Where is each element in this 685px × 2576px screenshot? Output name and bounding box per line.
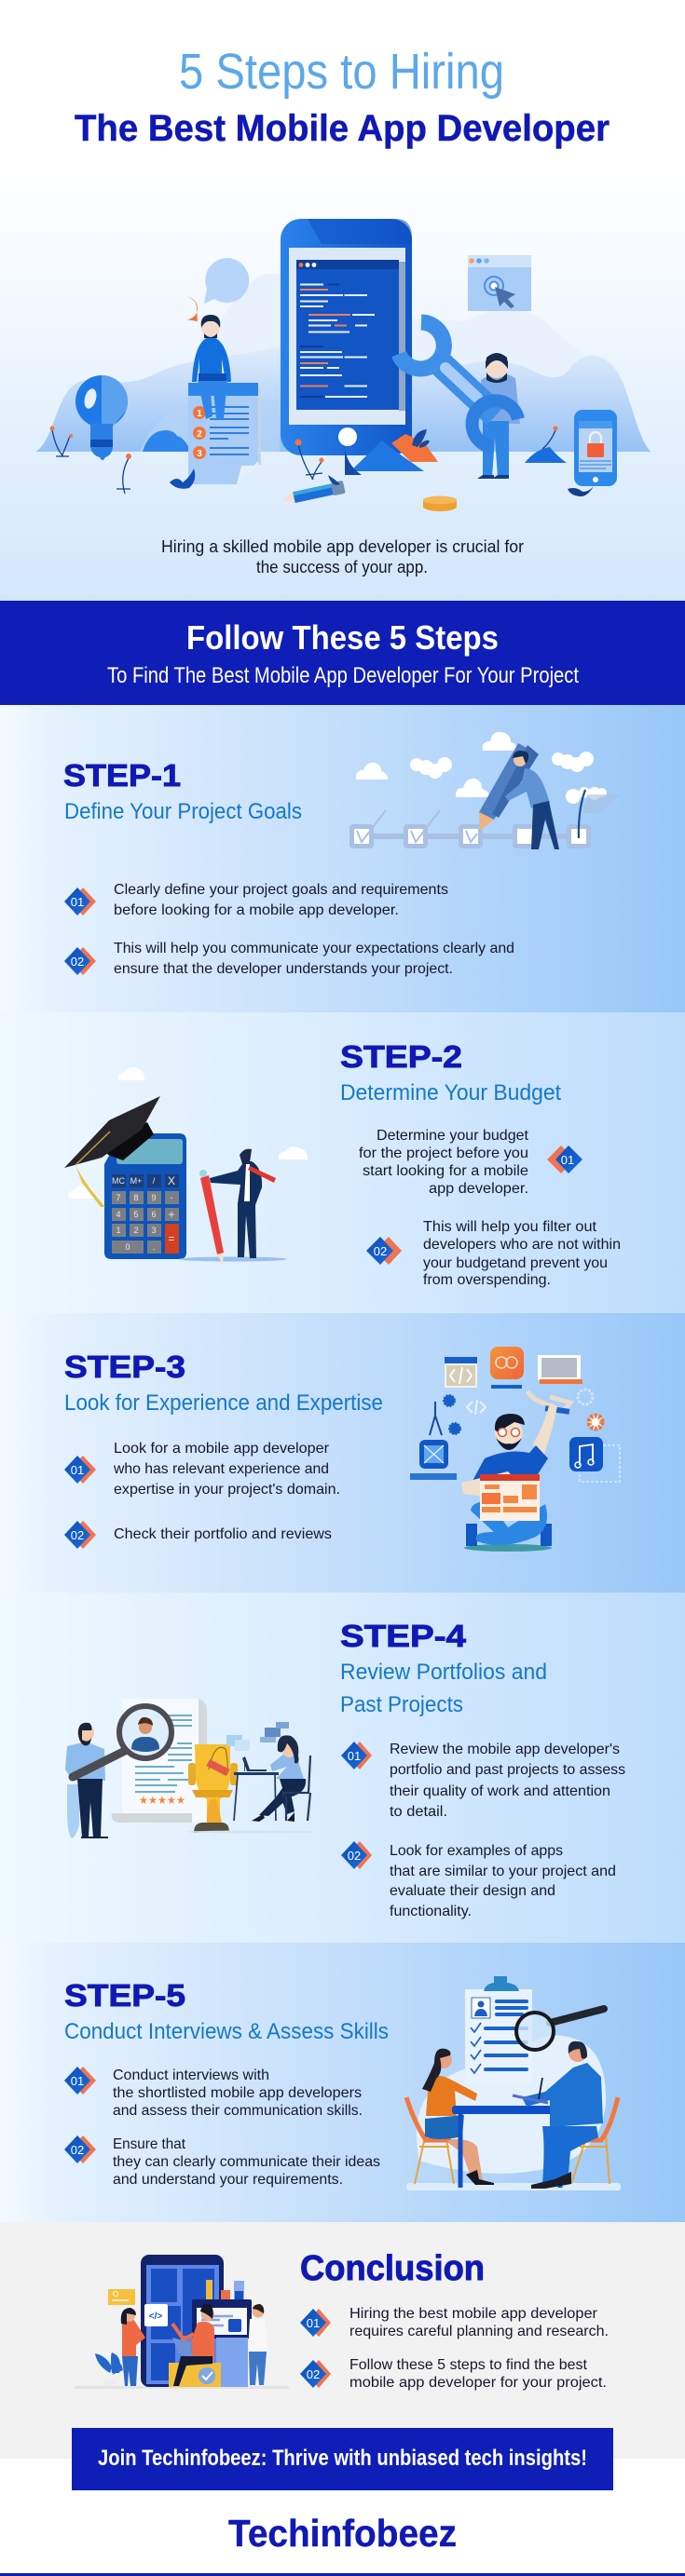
banner subheading: To Find The Best Mobile App Developer For Your Project [107,663,579,688]
text [390,1742,625,1820]
magnifier with profile [73,1706,171,1777]
bullet 2 [64,941,514,977]
text: portfolio and past projects to assess [390,1762,625,1778]
badge: 02 [307,2367,320,2381]
grey keys [112,1191,179,1254]
text: Check their portfolio and reviews [114,1526,332,1542]
note sheet with numbered list: 2 [197,429,202,440]
badge [64,2135,96,2163]
hero illustration [35,219,651,511]
title: 5 Steps to Hiring [179,44,504,100]
bullet 2 [366,1219,621,1288]
conclusion heading: Conclusion [300,2249,485,2288]
red pencil [199,1170,224,1265]
large phone [141,2255,224,2387]
title: The Best Mobile App Developer [75,108,610,149]
text: This will help you communicate your expectations clearly and [114,941,514,956]
calculator [104,1133,186,1259]
flag pole [579,790,585,838]
key labels: 2 [133,1226,139,1235]
woman standing [121,2308,145,2386]
clipboard [465,1976,532,2083]
desk block [216,2338,248,2387]
panel: step 1 [0,705,685,1012]
key labels: 0 [125,1242,130,1252]
window with cursor [468,255,531,311]
small bar [491,1385,522,1389]
badge [64,947,96,975]
key labels: 1 [116,1226,121,1235]
badge [300,2309,331,2337]
text: and assess their communication skills. [113,2103,363,2119]
key labels: M+ [130,1176,142,1186]
illustration: interview [406,1976,621,2190]
text: and understand your requirements. [113,2172,343,2188]
text [114,941,514,977]
step 1 subheading: Define Your Project Goals [64,799,302,824]
key labels: 4 [116,1210,121,1219]
step 2 subheading: Determine Your Budget [340,1080,561,1105]
step 5 subheading: Conduct Interviews & Assess Skills [64,2019,389,2044]
key labels: 9 [151,1193,157,1202]
badge: 01 [307,2316,320,2330]
badge [64,1521,96,1549]
coin stack [423,495,457,511]
step 2 heading: STEP-2 [340,1039,462,1074]
wrench [399,322,518,447]
text [113,1441,340,1498]
trophy [188,1744,238,1833]
code tag [467,1400,486,1415]
text: their quality of work and attention [390,1783,610,1799]
illustration: checklist with pencil [349,732,620,849]
man pushing pencil [505,751,559,849]
plant [95,2352,123,2386]
text: requires careful planning and research. [349,2324,609,2339]
bottom bar [0,2573,685,2576]
ruler [410,1473,457,1480]
step 4 subheading: Past Projects [340,1692,463,1717]
key labels: 5 [133,1210,139,1219]
note sheet with numbered list: 3 [197,449,202,459]
key labels: 6 [151,1210,157,1219]
bullet 1 [359,1128,582,1197]
mountain and orange rock [350,429,438,471]
panel: step 2 [0,1012,685,1313]
text: for the project before you [359,1146,528,1161]
text [114,882,448,918]
resume scroll [112,1699,207,1823]
developer [461,1403,557,1497]
desktop window [192,2299,252,2339]
woman at desk [234,1735,310,1822]
illustration: developer with app icons [410,1347,620,1552]
text [113,2068,363,2119]
leaves and blue mound [170,447,594,496]
panel: step 5 [0,1943,685,2222]
table [452,2106,569,2188]
text: app developer. [429,1181,528,1197]
badge: 01 [348,1749,361,1763]
man standing [248,2304,267,2385]
badge [547,1146,582,1173]
man with magnifier [65,1723,108,1837]
step 4 subheading: Review Portfolios and [340,1660,547,1685]
badge [341,1841,372,1869]
bullet 1 [64,1441,340,1498]
bullet 2 [341,1841,616,1919]
step 3 subheading: Look for Experience and Expertise [64,1390,383,1416]
badge: 02 [71,2143,84,2157]
badge: 02 [71,955,84,969]
text: functionality. [390,1904,472,1919]
floating cards [226,1722,289,1751]
text: who has relevant experience and [113,1461,329,1477]
call to action banner [72,2428,613,2490]
key labels: - [170,1193,173,1202]
key labels: / [153,1176,156,1186]
text: Look for a mobile app developer [114,1441,330,1457]
key labels: 7 [116,1193,121,1202]
step 4 subheading [340,1660,547,1717]
note sheet with numbered list: 1 [197,409,202,419]
phone with code [281,219,412,455]
badge [64,2067,96,2095]
illustration: resume review and trophy [65,1699,317,1837]
intro text: Hiring a skilled mobile app developer is crucial for [161,537,524,556]
bullet 1 [300,2306,609,2339]
stacked blocks [206,2280,244,2312]
raised wrench [527,1391,570,1415]
white blob [417,2035,606,2174]
text: the shortlisted mobile app developers [113,2085,362,2101]
text: your budgetand prevent you [423,1255,608,1271]
badge [300,2360,331,2388]
text: developers who are not within [423,1237,621,1253]
badge [64,1456,96,1484]
yellow crate with check [169,2363,221,2387]
intro text: the success of your app. [256,558,428,576]
graduation cap [64,1096,160,1207]
checkbox track [349,810,591,848]
text: Ensure that [113,2136,186,2152]
key labels: . [153,1242,155,1252]
clouds [68,1067,308,1199]
bullet 1 [341,1742,625,1820]
light bulb [75,375,128,460]
text: ensure that the developer understands your project. [114,961,453,977]
panel: hero background [0,158,685,602]
compass [430,1402,442,1435]
top keys [112,1174,179,1187]
equals key [165,1224,179,1254]
step 4 heading: STEP-4 [340,1619,467,1653]
interviewer man [513,2041,603,2189]
bullet 2 [64,1521,332,1549]
text [390,1843,616,1919]
text: to detail. [390,1804,447,1820]
text: This will help you filter out [423,1219,597,1235]
bullet 2 [300,2357,607,2391]
key labels: MC [112,1176,125,1186]
badge: 02 [348,1849,361,1863]
brand name: Techinfobeez [228,2512,457,2555]
speech bubbles [186,258,249,321]
text: Hiring the best mobile app developer [349,2306,598,2322]
panel: step 3 [0,1313,685,1593]
step 5 heading: STEP-5 [64,1978,185,2013]
code window [445,1357,477,1388]
developer with wrench [477,353,520,479]
magnifier [516,2009,604,2050]
panel: step 4 [0,1593,685,1943]
key labels [112,1174,175,1252]
note sheet with numbered list [188,383,261,484]
text: they can clearly communicate their ideas [113,2154,380,2170]
step 3 heading: STEP-3 [64,1349,185,1384]
yellow note [108,2289,135,2305]
text: Conduct interviews with [113,2068,269,2083]
badge: 01 [561,1153,574,1167]
badge: 02 [374,1244,387,1258]
text: that are similar to your project and [390,1864,616,1879]
resume scroll: ★★★★★ [139,1794,185,1807]
panel: conclusion [0,2222,685,2459]
text: Look for examples of apps [390,1843,563,1859]
small phone with lock [574,410,617,486]
badge: 02 [71,1528,84,1542]
seated person with laptop [172,2304,214,2386]
code card [144,2304,168,2326]
illustration: calculator, cap and man [64,1067,308,1265]
intro text [161,537,524,576]
step 1 heading: STEP-1 [63,758,181,793]
key labels: = [168,1232,175,1245]
mail tile [419,1440,448,1469]
text: expertise in your project's domain. [114,1482,340,1498]
banner heading: Follow These 5 Steps [186,618,499,657]
bullet 1 [64,2067,363,2119]
gears [444,1390,602,1434]
businessman [210,1149,276,1258]
key labels: 3 [151,1226,157,1235]
badge [366,1237,402,1265]
text: mobile app developer for your project. [349,2375,607,2391]
plant [67,1784,79,1837]
ground shadow [179,1257,287,1261]
grid card [538,1355,582,1384]
key labels: 8 [133,1193,139,1202]
bullet 2 [64,2135,380,2188]
plants [50,427,557,494]
call to action text: Join Techinfobeez: Thrive with unbiased tech insights! [98,2446,587,2471]
ground [75,2386,289,2389]
code card: </> [149,2312,162,2322]
ground shadow [186,1831,317,1833]
music tile [569,1437,620,1482]
bullet 1 [64,882,448,918]
chat tile [490,1347,524,1379]
text: evaluate their design and [390,1883,555,1899]
pencil [281,481,346,507]
badge: 01 [71,1463,84,1477]
badge: 01 [71,2074,84,2088]
orange tablet [480,1474,540,1521]
text: before looking for a mobile app developer. [114,902,399,918]
clouds [356,732,607,804]
text: Clearly define your project goals and requirements [114,882,448,898]
text: Determine your budget [377,1128,529,1144]
text: Review the mobile app developer's [390,1742,620,1757]
title [75,44,610,149]
crossed legs [466,1501,552,1546]
background hills [35,274,651,452]
text [359,1128,529,1197]
text [423,1219,621,1288]
text [113,2136,380,2188]
teal base [464,1544,552,1552]
right chair [570,2097,618,2184]
text [349,2306,609,2339]
interviewer woman [422,2049,494,2185]
seated person [192,315,231,419]
left chair [406,2097,454,2184]
panel: steps banner [0,601,685,705]
text: Follow these 5 steps to find the best [349,2357,588,2373]
text: start looking for a mobile [363,1163,528,1179]
key labels: + [168,1208,175,1221]
badge [64,888,96,915]
text [349,2357,607,2391]
illustration: team building an app [75,2255,289,2389]
badge [341,1742,372,1769]
text: from overspending. [423,1272,551,1288]
ground [406,2183,621,2190]
badge: 01 [71,895,84,909]
large pencil [479,743,539,831]
key labels: X [168,1174,175,1187]
